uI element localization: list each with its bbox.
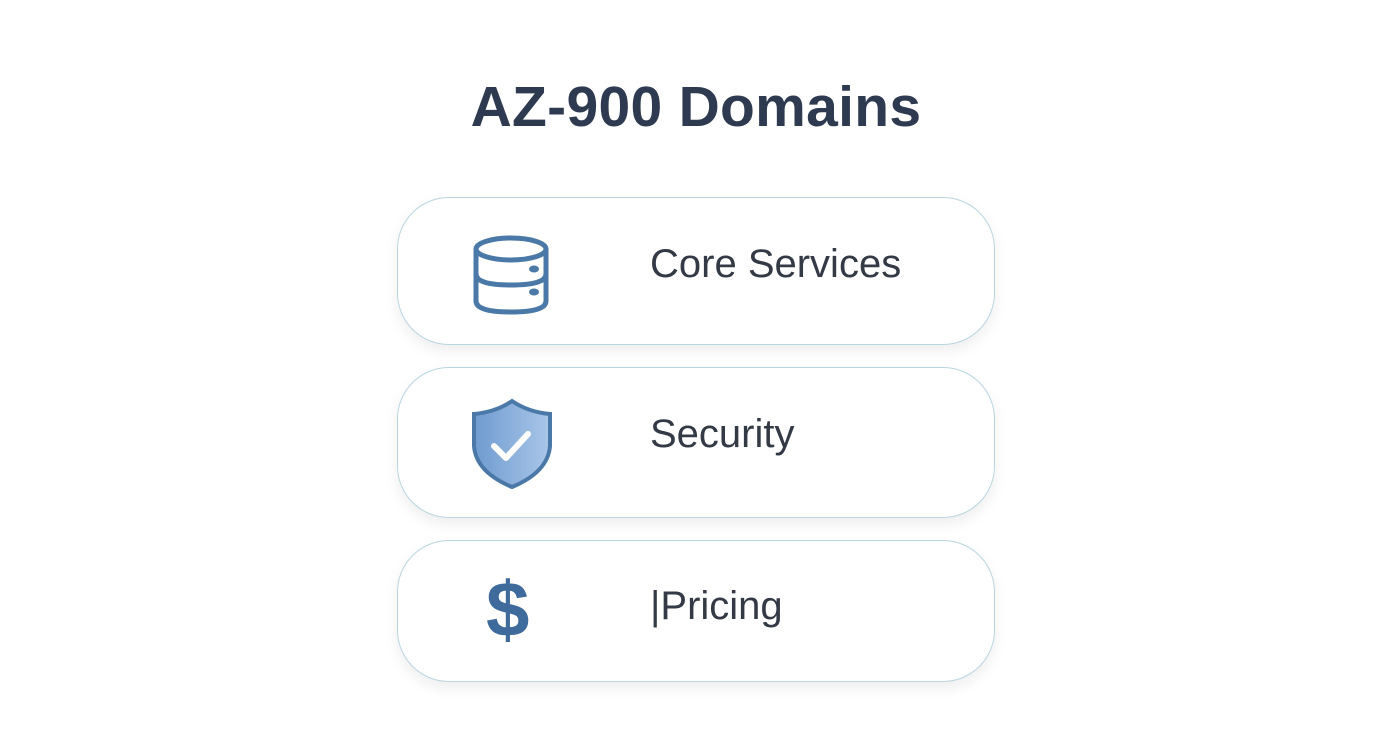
label: core services: Core Services: [650, 242, 901, 286]
label: pricing: |Pricing: [650, 584, 783, 628]
label: security: Security: [650, 412, 794, 456]
icon: database: [474, 236, 548, 314]
panel: pricing: [397, 540, 995, 682]
panel: core services: [397, 197, 995, 345]
icon: shield: [472, 398, 552, 490]
icon: dollar: $: [486, 565, 529, 653]
title: AZ-900 Domains: [471, 75, 921, 139]
panel: security: [397, 367, 995, 518]
